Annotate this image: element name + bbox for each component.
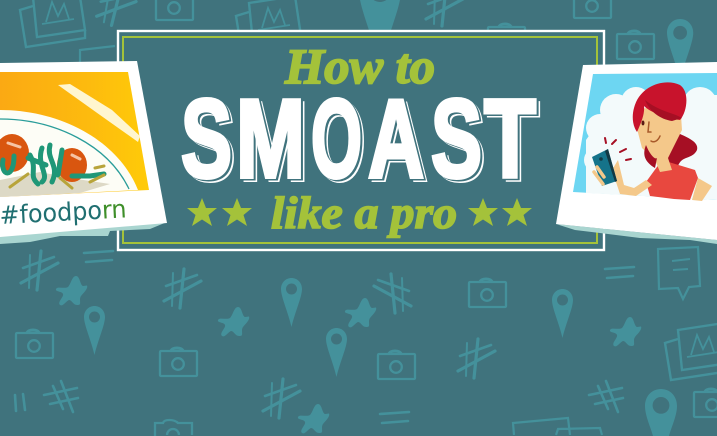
SMOAST main letters: O [311, 77, 362, 201]
SMOAST drop shadow outline: S [184, 80, 236, 204]
SMOAST shadow gap: T [486, 79, 538, 203]
SMOAST drop shadow outline: S [434, 80, 486, 204]
panel: left polaroid food photo [0, 61, 167, 244]
heading: SMOAST [181, 77, 540, 204]
woman: back hair [650, 130, 697, 166]
SMOAST shadow gap: S [433, 79, 484, 203]
basil greens [3, 145, 104, 184]
photo sky [573, 73, 717, 200]
food rice [0, 172, 110, 197]
SMOAST main letters: M [236, 77, 305, 201]
carrot shreds [10, 166, 104, 188]
SMOAST shadow gap: S [183, 79, 234, 203]
SMOAST main letters [181, 77, 536, 201]
SMOAST main letters: T [484, 77, 536, 201]
SMOAST main letters: S [431, 77, 482, 201]
SMOAST drop shadow outline: O [314, 80, 366, 204]
SMOAST shadow gap [183, 79, 538, 203]
SMOAST drop shadow outline: T [488, 80, 540, 204]
plate rim [0, 110, 138, 197]
polaroid torn shadow [556, 224, 717, 244]
icon: left stars [187, 198, 252, 226]
heading: How to: How to [284, 38, 435, 94]
photo background [0, 72, 149, 197]
SMOAST drop shadow outline [184, 80, 540, 204]
SMOAST shadow gap: O [313, 79, 364, 203]
woman: shirt [646, 160, 698, 200]
woman: nose and smile [648, 122, 660, 142]
hashtag handwriting: #foodporn [0, 194, 127, 230]
polaroid card [556, 62, 717, 240]
SMOAST main letters: S [181, 77, 232, 201]
cloud [584, 87, 717, 200]
woman: arm [612, 160, 652, 196]
SMOAST shadow gap: A [370, 79, 426, 203]
tomato right [57, 148, 87, 182]
woman: hair [633, 82, 686, 132]
SMOAST shadow gap: M [238, 79, 307, 203]
phone [592, 149, 617, 186]
panel: right polaroid selfie photo [556, 62, 717, 244]
woman: face [636, 100, 682, 172]
woman: eye [642, 120, 644, 126]
tomato highlights [8, 143, 80, 159]
polaroid card [0, 61, 167, 237]
fingers [594, 167, 604, 184]
SMOAST main letters: A [368, 77, 424, 201]
heading: like a pro: like a pro [271, 187, 457, 238]
title frame [118, 31, 604, 250]
knife [58, 84, 140, 142]
notification ticks [605, 138, 631, 160]
SMOAST drop shadow outline: M [240, 80, 308, 204]
tomato left [0, 134, 29, 172]
SMOAST drop shadow outline: A [372, 80, 428, 204]
polaroid torn shadow [0, 222, 167, 244]
icon: right stars [468, 198, 532, 226]
